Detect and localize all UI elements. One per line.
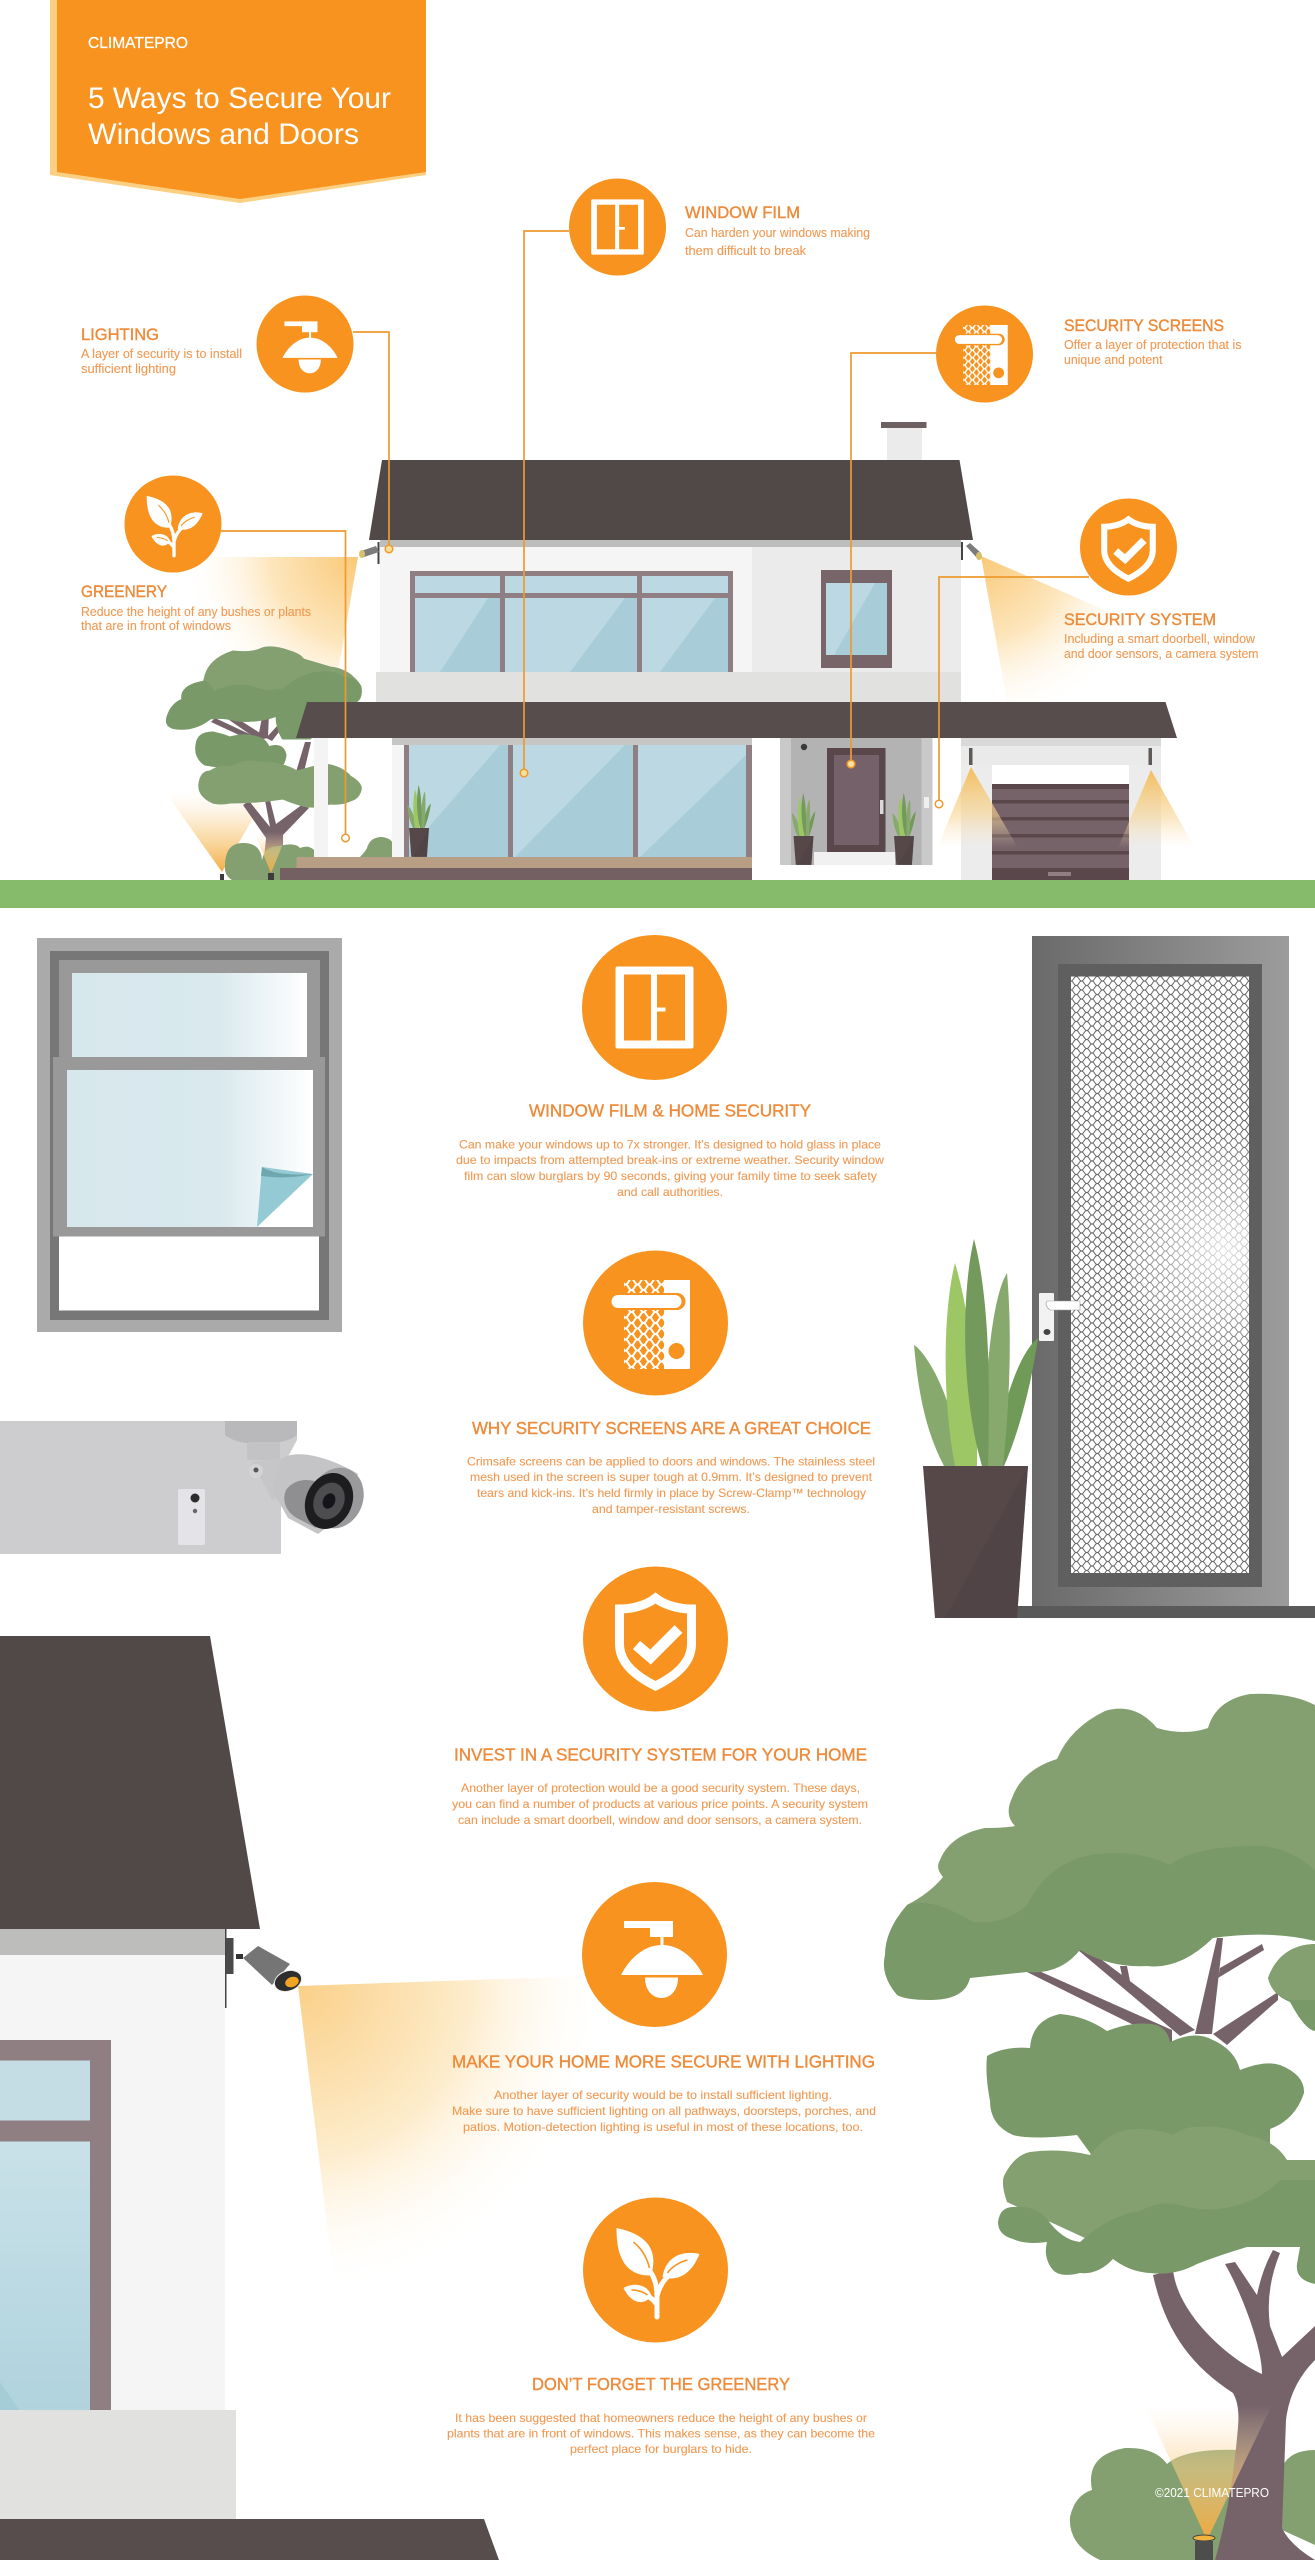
top crown dark layer <box>884 1846 1315 2000</box>
body: It has been suggested that homeowners reduce the height of any bushes or <box>455 2411 867 2425</box>
deck <box>280 857 752 880</box>
lower crown <box>1003 2127 1315 2245</box>
light cone: big <box>298 1975 620 2330</box>
section: window film <box>456 935 884 1199</box>
text: lighting <box>81 347 242 376</box>
text: greenery: that are in front of windows <box>81 619 231 633</box>
upper wall <box>380 540 961 672</box>
balcony band <box>376 672 961 702</box>
upper roof <box>369 460 973 540</box>
callout: security system <box>935 498 1258 808</box>
icon: screen <box>936 306 1033 402</box>
big roof <box>0 1636 260 1929</box>
trunk and branches <box>1027 1938 1315 2560</box>
sill band <box>0 2410 236 2519</box>
big tree <box>884 1694 1315 2560</box>
heading: window film: WINDOW FILM <box>685 204 800 222</box>
small tree <box>167 648 394 880</box>
wall camera right <box>961 542 982 560</box>
body <box>467 1454 875 1516</box>
eave band <box>0 1929 225 1955</box>
dot: greenery target <box>342 834 349 842</box>
lower large window <box>404 745 752 857</box>
lower roof <box>0 2519 499 2560</box>
upper large window <box>410 571 733 672</box>
body: plants that are in front of windows. This makes sense, as they can become the <box>447 2426 875 2440</box>
heading: MAKE YOUR HOME MORE SECURE WITH LIGHTING <box>452 2052 875 2072</box>
icon: window <box>569 178 666 276</box>
wall lamp <box>225 1929 305 2008</box>
grass <box>0 880 1315 908</box>
section: greenery <box>447 2198 875 2456</box>
body <box>456 1138 884 1199</box>
callout: lighting <box>81 296 393 553</box>
house illustration <box>280 422 1177 880</box>
heading: security system: SECURITY SYSTEM <box>1064 611 1216 629</box>
wall camera left <box>359 542 380 564</box>
text: security screens <box>1064 338 1242 367</box>
chimney <box>881 422 926 460</box>
heading: WHY SECURITY SCREENS ARE A GREAT CHOICE <box>472 1418 871 1438</box>
main title: 5 Ways to Secure Your <box>88 82 391 115</box>
heading: INVEST IN A SECURITY SYSTEM FOR YOUR HOME <box>454 1744 867 1764</box>
icon: lamp <box>256 296 354 392</box>
big house fragment <box>0 1636 620 2560</box>
body: patios. Motion-detection lighting is useful in most of these locations, too. <box>463 2120 863 2134</box>
icon: leaf <box>583 2198 728 2342</box>
dot: security system target <box>935 800 943 808</box>
upper small window <box>821 570 892 668</box>
illustration: camera and doorbell <box>0 1421 373 1554</box>
body <box>452 1781 868 1827</box>
porch entry <box>780 738 932 865</box>
peeled film corner <box>257 1167 313 1227</box>
mid roof <box>296 702 1177 738</box>
body: and call authorities. <box>617 1185 723 1199</box>
heading: lighting: LIGHTING <box>81 326 159 344</box>
light cone: right wall camera <box>981 556 1155 730</box>
section: lighting <box>452 1882 876 2134</box>
dot: lighting target <box>385 545 393 553</box>
brand label: CLIMATEPRO <box>88 35 188 52</box>
big window <box>0 2040 111 2411</box>
dot: security screens target <box>847 760 855 768</box>
garage <box>961 738 1161 880</box>
icon: screen <box>583 1250 728 1396</box>
middle crown <box>986 2014 1304 2157</box>
icon: window <box>582 935 727 1080</box>
body: you can find a number of products at various price points. A security system <box>452 1797 868 1811</box>
callout: security screens <box>847 306 1242 768</box>
heading: WINDOW FILM & HOME SECURITY <box>529 1100 811 1120</box>
section: security screens <box>467 1250 875 1516</box>
text: security screens: unique and potent <box>1064 353 1163 367</box>
icon: lamp <box>582 1882 727 2027</box>
body: perfect place for burglars to hide. <box>570 2442 752 2456</box>
light cone: trunk spot <box>254 832 288 873</box>
text: lighting: A layer of security is to install <box>81 347 242 361</box>
right crown lobe <box>1268 1944 1315 2031</box>
camera mount <box>225 1421 300 1500</box>
top crown <box>907 1694 1315 1950</box>
wall <box>0 1955 225 2411</box>
icon: shield <box>1080 498 1177 596</box>
plant: terrace <box>407 785 431 857</box>
callout: window film <box>520 178 870 777</box>
text: window film: them difficult to break <box>685 244 807 258</box>
body: can include a smart doorbell, window and door sensors, a camera system. <box>458 1813 862 1827</box>
text: security system: Including a smart doorbell, window <box>1064 632 1256 646</box>
body: Another layer of security would be to install sufficient lighting. <box>494 2088 832 2102</box>
body: Make sure to have sufficient lighting on all pathways, doorsteps, porches, and <box>452 2104 876 2118</box>
dot: window film target <box>520 769 528 777</box>
illustration: window with film <box>37 938 342 1332</box>
illustration: security door <box>1017 936 1315 1618</box>
light cone: tree spot <box>1145 2405 1272 2540</box>
garden spot fixtures <box>220 873 274 887</box>
light cone: left wall camera <box>185 557 358 735</box>
icon: shield <box>583 1566 728 1712</box>
text: security system: and door sensors, a camera system <box>1064 647 1258 661</box>
main title second line: Windows and Doors <box>88 118 359 151</box>
text: lighting: sufficient lighting <box>81 362 176 376</box>
header banner <box>50 0 426 203</box>
heading: greenery: GREENERY <box>81 583 167 601</box>
plant: porch left <box>792 793 815 865</box>
body: and tamper-resistant screws. <box>592 1502 750 1516</box>
body: due to impacts from attempted break-ins or extreme weather. Security window <box>456 1153 884 1167</box>
body: Can make your windows up to 7x stronger. It’s designed to hold glass in place <box>459 1138 881 1152</box>
illustration: potted plant <box>914 1239 1038 1618</box>
body: tears and kick-ins. It’s held firmly in place by Screw-Clamp™ technology <box>477 1486 866 1500</box>
bushes <box>1070 2448 1315 2560</box>
text: greenery: Reduce the height of any bushes or plants <box>81 605 311 619</box>
heading: security screens: SECURITY SCREENS <box>1064 317 1224 335</box>
doorbell <box>178 1489 205 1545</box>
copyright: ©2021 CLIMATEPRO <box>1155 2486 1269 2500</box>
body <box>452 2088 876 2134</box>
body: film can slow burglars by 90 seconds, giving your family time to seek safety <box>464 1169 877 1183</box>
icon: leaf <box>124 476 222 572</box>
garage light cones <box>937 767 1195 848</box>
door handle <box>1039 1293 1080 1341</box>
section: security system <box>452 1566 868 1827</box>
body: mesh used in the screen is super tough at 0.9mm. It’s designed to prevent <box>470 1470 873 1484</box>
tree spot fixture <box>1193 2535 1215 2560</box>
callout: greenery <box>81 476 349 842</box>
lower wall and post <box>314 738 752 858</box>
text: security screens: Offer a layer of protection that is <box>1064 338 1242 352</box>
body: Crimsafe screens can be applied to doors and windows. The stainless steel <box>467 1454 875 1468</box>
light cone: left garden spot <box>165 792 268 872</box>
camera body <box>272 1454 373 1537</box>
body <box>447 2411 875 2456</box>
body: Another layer of protection would be a good security system. These days, <box>461 1781 860 1795</box>
text: greenery <box>81 605 311 633</box>
text: window film: Can harden your windows making <box>685 226 870 240</box>
lower crown dark layer <box>998 2180 1315 2284</box>
heading: DON’T FORGET THE GREENERY <box>532 2374 790 2394</box>
text: security system <box>1064 632 1258 661</box>
plant: porch right <box>892 793 916 865</box>
text: window film <box>685 226 870 258</box>
